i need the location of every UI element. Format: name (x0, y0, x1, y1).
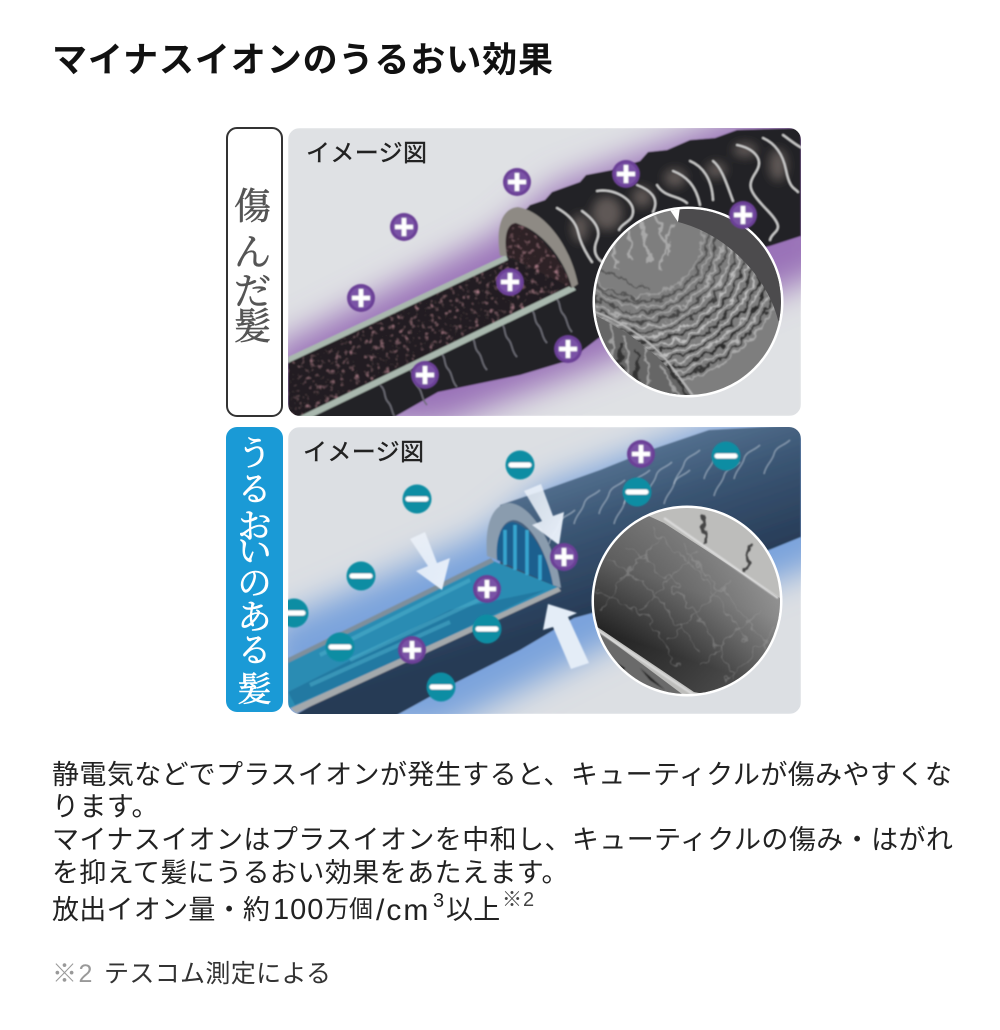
label: moisturized hair: る (238, 623, 272, 672)
blue glow (288, 427, 801, 714)
footnote: ※2 (52, 960, 94, 988)
emission amount line: 以上 (446, 895, 501, 925)
magnified lens: healthy cuticle (590, 505, 790, 700)
emission amount line: /cm (376, 894, 430, 927)
hair: rear section (296, 128, 802, 420)
label: damaged hair: だ (234, 261, 271, 315)
label: moisturized hair: い (238, 524, 272, 573)
emission amount line: 3 (433, 890, 444, 912)
label: moisturized hair: る (238, 462, 272, 511)
hair: cross-section dome (499, 207, 578, 288)
label: moisturized hair: お (238, 499, 272, 548)
body text: ります。 (52, 792, 159, 822)
label: damaged hair: 傷 (234, 176, 271, 230)
lens: lower strand (596, 316, 690, 395)
arrow: upper centre (524, 484, 564, 545)
footnote: テスコム測定による (104, 960, 331, 988)
emission amount line: 万個 (325, 896, 373, 923)
magnified lens: damaged cuticle (592, 206, 784, 398)
label: moisturized hair: あ (238, 590, 272, 639)
emission amount line (52, 889, 535, 927)
label: moisturized hair (226, 427, 283, 712)
label: damaged hair (226, 127, 283, 417)
label: moisturized hair: 髪 (238, 662, 272, 711)
body text: を抑えて髪にうるおい効果をあたえます。 (52, 858, 569, 888)
title: マイナスイオンのうるおい効果 (52, 41, 554, 80)
arrow: upper left (410, 532, 450, 590)
label: moisturized hair: う (238, 426, 272, 475)
label: damaged hair: 髪 (234, 296, 271, 350)
purple glow (288, 128, 801, 416)
ions: damaged panel (347, 160, 757, 389)
caption: image diagram bottom: イメージ図 (303, 439, 424, 466)
hair: rear section (293, 425, 801, 716)
emission amount line: 100 (273, 894, 324, 926)
ions: moisturized panel (280, 440, 740, 702)
panel: moisturized hair illustration (288, 427, 801, 714)
caption: image diagram top: イメージ図 (306, 140, 427, 167)
body text: 静電気などでプラスイオンが発生すると、キューティクルが傷みやすくな (52, 760, 952, 790)
panel: damaged hair illustration (288, 128, 801, 416)
label: damaged hair: ん (234, 222, 271, 276)
emission amount line: 放出イオン量・約 (52, 895, 270, 925)
hair: cross-section dome (487, 503, 561, 588)
emission amount line: ※2 (502, 889, 535, 911)
arrow: lower centre (543, 604, 589, 669)
body text (52, 760, 953, 927)
hair: cut core (288, 558, 561, 713)
body text: マイナスイオンはプラスイオンを中和し、キューティクルの傷み・はがれ (52, 825, 953, 855)
label: moisturized hair: の (238, 556, 272, 605)
lens: upper dark band (678, 209, 781, 321)
hair: cut core (288, 255, 576, 420)
